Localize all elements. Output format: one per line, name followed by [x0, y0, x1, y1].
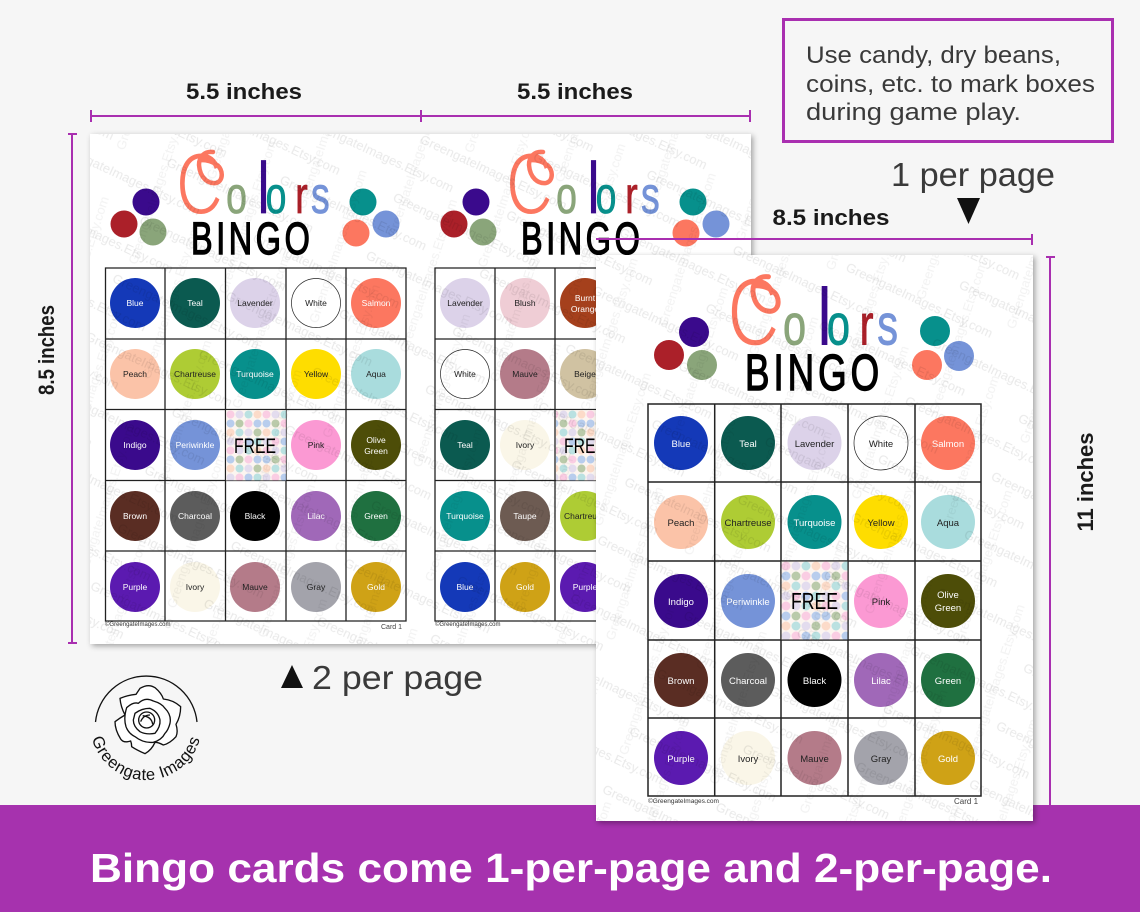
- cell Teal: Teal: [739, 439, 757, 450]
- dimension: 5.5 inches right card: 5.5 inches: [517, 79, 633, 104]
- cell Gold: [921, 731, 975, 785]
- label: 1 per page: 1 per page: [891, 156, 1055, 193]
- cell Purple: [560, 562, 610, 612]
- cell FREE: FREE: [564, 435, 606, 458]
- title: Colors: o: [556, 166, 577, 224]
- title: BINGO: BINGO: [521, 215, 643, 264]
- title: Colors: C: [727, 258, 780, 367]
- card 1 bingo grid: [105, 268, 406, 621]
- cell Gray: Gray: [307, 582, 326, 592]
- cell Salmon: [351, 278, 401, 328]
- cell Chartreuse: [560, 491, 610, 541]
- cell Periwinkle: Periwinkle: [726, 597, 770, 608]
- footer banner: [0, 805, 1140, 912]
- cell Chartreuse: Chartreuse: [564, 511, 606, 521]
- cell Aqua: [921, 495, 975, 549]
- cell Green: [351, 491, 401, 541]
- title: Colors: s: [311, 166, 330, 224]
- cell Ivory: Ivory: [186, 582, 205, 592]
- cell Periwinkle: Periwinkle: [176, 440, 215, 450]
- cell Taupe: Taupe: [513, 511, 537, 521]
- cell FREE: FREE: [234, 435, 276, 458]
- cell Lavender: [230, 278, 280, 328]
- cell Salmon: Salmon: [362, 298, 391, 308]
- cell White: [854, 416, 908, 470]
- cell White: White: [454, 369, 476, 379]
- title: Colors: [727, 258, 898, 367]
- cell Burnt Orange: [560, 278, 610, 328]
- dimension: 8.5 inches sheet height: [34, 134, 77, 643]
- title: Colors: [506, 134, 660, 233]
- right colour dots: [342, 188, 400, 246]
- cell Blush: [500, 278, 550, 328]
- cell Peach: Peach: [668, 518, 694, 529]
- cell Brown: Brown: [123, 511, 147, 521]
- title: Colors: o: [266, 166, 287, 224]
- cell Olive Green: [351, 420, 401, 470]
- cell Purple: Purple: [123, 582, 148, 592]
- cell Olive Green: Green: [935, 603, 961, 614]
- cell Lavender: Lavender: [795, 439, 834, 450]
- title: Colors: o: [596, 166, 617, 224]
- card 1 footer label: Card 1: [381, 624, 402, 631]
- cell Lilac: Lilac: [307, 511, 325, 521]
- footer copyright: ©GreengateImages.com: [648, 797, 719, 805]
- cell Ivory: [170, 562, 220, 612]
- cell Blue: Blue: [456, 582, 474, 592]
- cell Indigo: Indigo: [668, 597, 694, 608]
- cell Mauve: Mauve: [800, 754, 829, 765]
- cell Teal: [170, 278, 220, 328]
- cell Black: Black: [245, 511, 266, 521]
- callout: marker tip: [784, 20, 1112, 142]
- title: BINGO: BINGO: [745, 345, 883, 401]
- cell Ivory: [500, 420, 550, 470]
- panel: 1-per-page sheet: [596, 255, 1033, 821]
- cell Lavender: [788, 416, 842, 470]
- cell Olive Green: [921, 574, 975, 628]
- cell Green: Green: [935, 676, 961, 687]
- cell Brown: [654, 653, 708, 707]
- cell White: White: [869, 439, 893, 450]
- cell Blue: Blue: [671, 439, 691, 450]
- cell Peach: Peach: [123, 369, 147, 379]
- title: Colors: o: [783, 292, 806, 357]
- cell Lilac: [291, 491, 341, 541]
- cell Brown: [110, 491, 160, 541]
- cell Gray: [291, 562, 341, 612]
- cell Gold: Gold: [367, 582, 385, 592]
- label: 2 per page: 2 per page: [312, 659, 483, 696]
- cell Black: [788, 653, 842, 707]
- cell Blue: [110, 278, 160, 328]
- cell Olive Green: Green: [364, 446, 388, 456]
- cell Pink: [291, 420, 341, 470]
- title: BINGO: BINGO: [191, 215, 313, 264]
- dimension: 8.5 inches width of single sheet: 8.5 inches: [772, 205, 890, 230]
- arrow: down to single sheet: [957, 198, 980, 224]
- left colour dots: [440, 188, 496, 246]
- cell Blue: [440, 562, 490, 612]
- cell Purple: [110, 562, 160, 612]
- right colour dots: [672, 188, 730, 246]
- card 2 footer copyright: ©GreengateImages.com: [435, 621, 500, 628]
- cell Lavender: Lavender: [237, 298, 273, 308]
- cell Yellow: Yellow: [304, 369, 329, 379]
- cell Indigo: [654, 574, 708, 628]
- title: Colors: s: [877, 292, 898, 357]
- logo wordmark: Greengate Images: [93, 736, 200, 780]
- cell Peach: [654, 495, 708, 549]
- cell Pink: [854, 574, 908, 628]
- icon: succulent flower: [115, 686, 181, 754]
- title: Colors: o: [226, 166, 247, 224]
- cell Chartreuse: Chartreuse: [174, 369, 216, 379]
- logo: Greengate Images: [93, 675, 200, 780]
- cell Charcoal: [721, 653, 775, 707]
- cell Turquoise: Turquoise: [236, 369, 274, 379]
- cell Aqua: [351, 349, 401, 399]
- cell Turquoise: Turquoise: [446, 511, 484, 521]
- cell Ivory: [721, 731, 775, 785]
- cell Turquoise: Turquoise: [794, 518, 835, 529]
- cell Lavender: Lavender: [447, 298, 483, 308]
- cell Blue: [654, 416, 708, 470]
- cell Black: Black: [803, 676, 826, 687]
- cell Gold: Gold: [516, 582, 534, 592]
- cell Green: [921, 653, 975, 707]
- cell Charcoal: [170, 491, 220, 541]
- left colour dots: [110, 188, 166, 246]
- banner headline: Bingo cards come 1-per-page and 2-per-page.: [90, 845, 1052, 891]
- title: Colors: r: [295, 166, 308, 224]
- dimension: 11 inches: 11 inches: [1073, 432, 1098, 532]
- dimension: 5.5 inches left card: 5.5 inches: [186, 79, 302, 104]
- cell Turquoise: [788, 495, 842, 549]
- title: Colors: r: [625, 166, 638, 224]
- cell FREE: [226, 410, 286, 480]
- cell Burnt Orange: Burnt: [575, 293, 596, 303]
- cell Teal: Teal: [187, 298, 203, 308]
- cell White: [292, 278, 340, 328]
- cell Chartreuse: [721, 495, 775, 549]
- cell Black: [230, 491, 280, 541]
- cell Gray: Gray: [871, 754, 892, 765]
- cell Yellow: [291, 349, 341, 399]
- cell Gold: [500, 562, 550, 612]
- cell Blue: Blue: [126, 298, 144, 308]
- cell Salmon: Salmon: [932, 439, 964, 450]
- title: Colors: [176, 134, 330, 233]
- title: Colors: l: [818, 272, 831, 362]
- cell Indigo: Indigo: [123, 440, 147, 450]
- cell Purple: [654, 731, 708, 785]
- dimension: 8.5 inches width of single sheet: [596, 205, 1032, 245]
- header logo: [654, 258, 974, 401]
- bingo grid: [648, 404, 981, 796]
- cell Charcoal: Charcoal: [178, 511, 212, 521]
- cell Green: Green: [364, 511, 388, 521]
- title: Colors: o: [827, 292, 850, 357]
- cell Purple: Purple: [667, 754, 695, 765]
- cell White: White: [305, 298, 327, 308]
- card 2 header logo: [440, 134, 730, 264]
- title: Colors: C: [506, 134, 553, 233]
- cell Yellow: Yellow: [867, 518, 895, 529]
- cell Gold: [351, 562, 401, 612]
- cell Teal: [440, 420, 490, 470]
- title: Colors: l: [258, 149, 269, 229]
- cell Burnt Orange: Orange: [571, 304, 599, 314]
- cell Olive Green: Olive: [366, 435, 386, 445]
- cell Turquoise: [230, 349, 280, 399]
- card 2 bingo grid: [435, 268, 736, 621]
- cell Lilac: [854, 653, 908, 707]
- left colour dots: [654, 317, 717, 380]
- cell Purple: Purple: [573, 582, 598, 592]
- cell Lilac: Lilac: [871, 676, 891, 687]
- cell Yellow: [854, 495, 908, 549]
- cell White: [440, 350, 490, 398]
- cell Ivory: Ivory: [738, 754, 759, 765]
- cell FREE: [556, 410, 615, 480]
- cell FREE: FREE: [791, 588, 838, 614]
- cell Indigo: [110, 420, 160, 470]
- arrow: up to double sheet: [281, 665, 303, 688]
- dimension: 5.5 inches right card: [421, 79, 750, 122]
- cell Chartreuse: Chartreuse: [724, 518, 772, 529]
- cell Mauve: Mauve: [242, 582, 268, 592]
- title: Colors: C: [176, 134, 223, 233]
- cell Teal: [721, 416, 775, 470]
- cell Olive Green: Olive: [937, 590, 959, 601]
- cell Mauve: [788, 731, 842, 785]
- card 1 footer copyright: ©GreengateImages.com: [105, 621, 170, 628]
- cell Ivory: Ivory: [516, 440, 535, 450]
- dimension: 11 inches: [1046, 257, 1098, 805]
- cell Periwinkle: [721, 574, 775, 628]
- right colour dots: [912, 316, 974, 380]
- title: Colors: l: [588, 149, 599, 229]
- title: Colors: r: [860, 292, 874, 357]
- cell Brown: Brown: [668, 676, 694, 687]
- cell Salmon: [921, 416, 975, 470]
- cell Mauve: [500, 349, 550, 399]
- panel: 2-per-page sheet: [90, 134, 751, 644]
- cell Teal: Teal: [457, 440, 473, 450]
- card 1 header logo: [110, 134, 400, 264]
- dimension: 5.5 inches left card: [91, 79, 421, 122]
- cell Beige: [560, 349, 610, 399]
- cell Pink: Pink: [308, 440, 325, 450]
- cell Taupe: [500, 491, 550, 541]
- cell Aqua: Aqua: [937, 518, 960, 529]
- cell Lavender: [440, 278, 490, 328]
- cell Gold: Gold: [938, 754, 958, 765]
- cell Chartreuse: [170, 349, 220, 399]
- cell Periwinkle: [170, 420, 220, 470]
- cell Mauve: [230, 562, 280, 612]
- cell Beige: Beige: [574, 369, 596, 379]
- cell Pink: Pink: [872, 597, 890, 608]
- cell Turquoise: [440, 491, 490, 541]
- footer card label: Card 1: [954, 797, 979, 806]
- cell Charcoal: Charcoal: [729, 676, 767, 687]
- callout: marker tip: coins, etc. to mark boxes: [806, 71, 1095, 98]
- cell Peach: [110, 349, 160, 399]
- cell Mauve: Mauve: [512, 369, 538, 379]
- dimension: 8.5 inches sheet height: 8.5 inches: [34, 305, 59, 395]
- cell Gray: [854, 731, 908, 785]
- callout: marker tip: Use candy, dry beans,: [806, 42, 1061, 69]
- title: Colors: s: [641, 166, 660, 224]
- cell FREE: [782, 562, 848, 640]
- callout: marker tip: during game play.: [806, 99, 1021, 126]
- cell Aqua: Aqua: [366, 369, 386, 379]
- cell Blush: Blush: [514, 298, 536, 308]
